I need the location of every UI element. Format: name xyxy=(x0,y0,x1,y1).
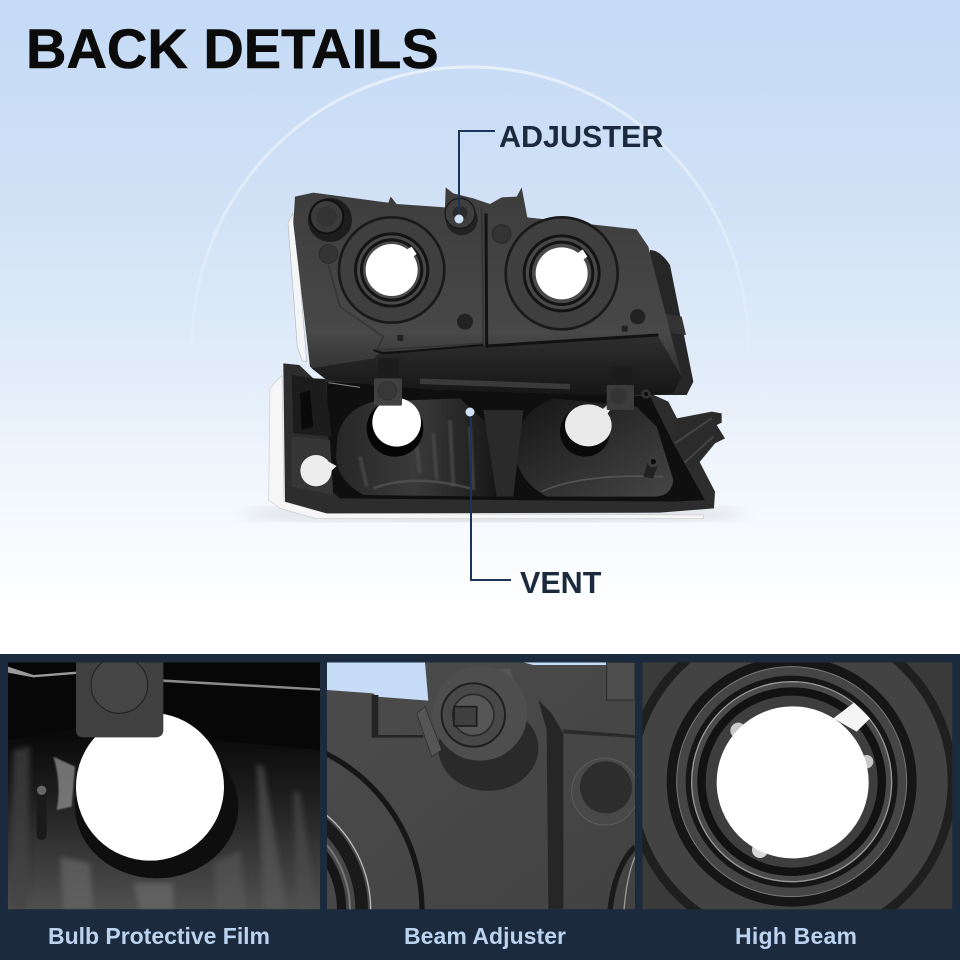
clips xyxy=(730,722,744,736)
cap top left xyxy=(308,198,352,242)
rear fin right xyxy=(650,250,693,395)
right socket edge xyxy=(610,847,635,910)
left corner compartment xyxy=(292,375,332,437)
caption: beam adjuster: Beam Adjuster xyxy=(404,923,566,949)
panel: beam adjuster xyxy=(320,662,638,910)
dark socket xyxy=(75,772,238,878)
title: BACK DETAILS xyxy=(26,17,439,80)
lower shelf shading xyxy=(312,337,682,395)
bolts xyxy=(457,314,473,330)
socket rings xyxy=(320,751,422,910)
callout: vent xyxy=(466,408,602,600)
callout: adjuster xyxy=(454,120,663,224)
panel: bulb protective film xyxy=(8,657,320,909)
detail band xyxy=(0,654,960,960)
right bulb socket xyxy=(504,216,619,331)
sky gap xyxy=(327,662,428,701)
housing body xyxy=(293,187,682,395)
retaining tabs xyxy=(374,358,651,410)
tray interior xyxy=(327,382,705,502)
adjuster knob xyxy=(446,203,478,235)
lower lamp tray xyxy=(269,363,725,519)
callout: vent: VENT xyxy=(520,566,602,600)
right bowl xyxy=(513,398,673,497)
right bracket xyxy=(675,412,725,472)
adjuster knob xyxy=(438,721,538,791)
vertical rib xyxy=(538,700,563,909)
notch xyxy=(372,695,423,738)
film circles xyxy=(367,400,423,457)
plug xyxy=(572,758,638,825)
film disc and tab xyxy=(717,706,869,858)
left bowl xyxy=(336,398,507,497)
panel: high beam xyxy=(642,662,952,910)
chrome sliver xyxy=(288,213,307,362)
ribs xyxy=(10,747,317,909)
callout: adjuster: ADJUSTER xyxy=(499,120,663,154)
background gradient xyxy=(0,0,960,654)
film disc xyxy=(76,713,224,861)
decorative ring arc xyxy=(192,67,748,623)
caption: high beam: High Beam xyxy=(735,923,857,949)
caption: bulb protective film: Bulb Protective Film xyxy=(48,923,270,949)
top strips xyxy=(8,667,76,677)
left bulb socket xyxy=(338,216,446,324)
upper lamp housing xyxy=(288,187,693,395)
ground shadow xyxy=(240,508,747,521)
retaining tab xyxy=(76,662,163,737)
headlight product photo xyxy=(240,187,747,521)
raised plate edges xyxy=(328,208,483,350)
